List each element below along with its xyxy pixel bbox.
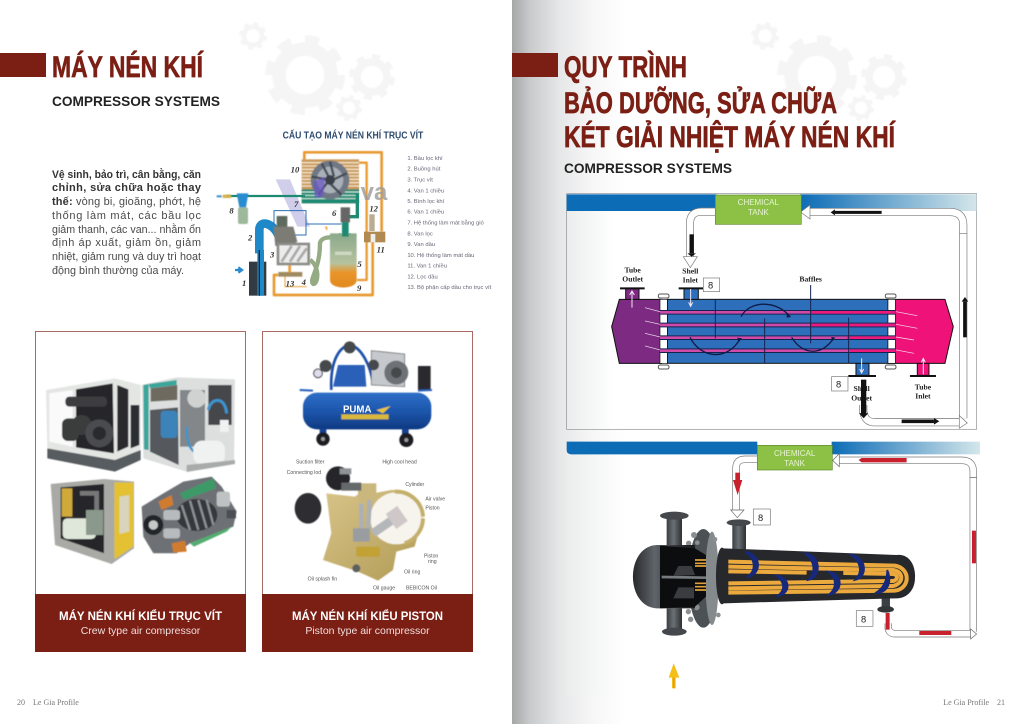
part callouts: Cylinder (405, 482, 425, 488)
baffles (715, 285, 849, 363)
labels: Tube (915, 382, 932, 391)
number 8 box top: 8 (758, 513, 763, 523)
part callouts: Air valve (425, 496, 445, 502)
separator tank (330, 207, 357, 287)
number 8 box bottom (856, 611, 873, 626)
card footer (35, 594, 246, 652)
nozzles (660, 512, 894, 636)
decorative gears left page (240, 23, 393, 120)
card caption: MÁY NÉN KHÍ KIỂU PISTON (292, 608, 443, 623)
left title: MÁY NÉN KHÍ (52, 50, 203, 84)
blue control lines (274, 211, 342, 235)
parts legend (407, 156, 492, 291)
paragraph: định áp xuất, giảm ồn, giảm (52, 237, 201, 249)
number 8 box bottom: 8 (836, 380, 841, 390)
card: piston compressor (262, 332, 473, 652)
part numbers (229, 165, 385, 293)
machine: yellow panel unit (51, 479, 134, 564)
parts legend: 13. Bộ phận cấp dầu cho trục vít (407, 285, 492, 291)
part numbers: 5 (357, 259, 362, 269)
card subcaption: Piston type air compressor (305, 625, 430, 637)
chemical tank: CHEMICAL (774, 449, 816, 458)
paragraph: động bình thường của máy. (52, 265, 184, 277)
part numbers: 9 (357, 283, 362, 293)
parts legend: 4. Van 1 chiều (407, 188, 444, 194)
oil filter items 11 and 12 (364, 214, 385, 242)
labels: Baffles (799, 275, 822, 284)
parts legend: 2. Buồng hút (407, 167, 441, 173)
labels (622, 266, 932, 402)
machine: teal frame unit (142, 377, 235, 472)
part numbers: 11 (377, 244, 385, 254)
cooling radiator and fan (302, 159, 359, 203)
black outlet arrow (859, 380, 868, 418)
part callouts: Oil ring (404, 569, 420, 575)
chemical tank: TANK (748, 208, 769, 217)
part numbers: 8 (229, 205, 234, 215)
diagram frame (567, 194, 977, 429)
blue intake pipe (259, 224, 278, 253)
card: screw compressor (35, 332, 246, 652)
right title: KÉT GIẢI NHIỆT MÁY NÉN KHÍ (564, 120, 895, 154)
labels: Tube (624, 266, 641, 275)
shell and tube exchanger (633, 512, 915, 636)
shell body (723, 548, 915, 603)
tube bundle (728, 562, 907, 593)
labels: Outlet (622, 275, 644, 284)
panel background (567, 454, 624, 695)
paragraph: giảm thanh, các van... nhằm ổn (52, 223, 201, 236)
labels: Inlet (683, 276, 698, 285)
right subtitle: COMPRESSOR SYSTEMS (564, 160, 732, 176)
right title: BẢO DƯỠNG, SỬA CHỮA (564, 86, 837, 120)
parts legend: 12. Lọc dầu (407, 274, 438, 280)
compressor body (273, 216, 310, 277)
number 8 box bottom (832, 377, 848, 391)
chemical tank: CHEMICAL (738, 198, 779, 207)
paragraph: chỉnh, sửa chữa hoặc thay (52, 182, 202, 194)
parts legend: 9. Van dầu (407, 242, 435, 248)
part numbers: 12 (369, 203, 379, 213)
3D heat exchanger diagram (567, 442, 980, 695)
parts legend: 1. Bầu lọc khí (407, 156, 443, 162)
item 1 intake filter (235, 250, 266, 296)
screw compressor schematic (217, 131, 492, 296)
left subtitle: COMPRESSOR SYSTEMS (52, 93, 220, 109)
parts legend: 3. Trục vít (407, 177, 433, 183)
green oil line (310, 237, 331, 284)
paragraph: nhiệt, giảm rung và duy trì hoạt (52, 251, 201, 263)
right title: QUY TRÌNH (564, 50, 687, 84)
card subcaption: Crew type air compressor (81, 625, 201, 637)
labels: Inlet (915, 391, 931, 400)
blue band (567, 442, 980, 454)
piston head cutaway (295, 466, 423, 581)
watermark: iva (354, 179, 388, 206)
right page spine shadow (512, 0, 625, 724)
schematic title: CẤU TẠO MÁY NÉN KHÍ TRỤC VÍT (283, 131, 423, 142)
number 8 box top (753, 509, 770, 525)
watermark (276, 179, 388, 227)
right heading bar (512, 53, 558, 77)
number 8 box top: 8 (708, 281, 713, 291)
part callouts: Oil gauge (373, 585, 395, 591)
part callouts (287, 460, 445, 591)
tubes (660, 312, 895, 351)
card caption: MÁY NÉN KHÍ KIỂU TRỤC VÍT (59, 608, 223, 623)
paragraph: Vệ sinh, bảo trì, cân bằng, căn (52, 168, 201, 181)
red flow arrows (733, 458, 976, 635)
left page footer: 20 Le Gia Profile (17, 698, 79, 707)
blue baffles (745, 552, 889, 597)
machine: screw cutaway (142, 477, 237, 553)
item 8 filter (217, 193, 248, 224)
labels: Shell (854, 384, 870, 393)
part callouts: Connecting lod (287, 470, 321, 476)
right title (564, 50, 895, 154)
part numbers: 1 (242, 278, 246, 288)
decorative gears right page (752, 23, 905, 120)
green air line (227, 193, 357, 253)
paragraph: thống làm mát, các bầu lọc (52, 210, 202, 222)
black flow arrows (687, 209, 968, 425)
return pipes (690, 212, 967, 422)
heat exchanger (612, 285, 953, 376)
part numbers: 4 (301, 277, 307, 287)
parts legend: 6. Van 1 chiều (407, 210, 444, 216)
number 8 box top (703, 278, 720, 292)
part numbers: 10 (291, 165, 300, 175)
chemical tank: TANK (784, 459, 806, 468)
puma air compressor: PUMA (343, 404, 371, 415)
parts legend: 11. Van 1 chiều (407, 264, 447, 270)
channel head (633, 545, 695, 608)
part numbers: 13 (286, 278, 295, 288)
part callouts: High cool head (382, 460, 417, 466)
right page footer: Le Gia Profile 21 (943, 698, 1005, 707)
shell flow arcs (690, 304, 834, 355)
oil pipes (274, 152, 382, 295)
part callouts: Piston (425, 505, 440, 511)
part numbers: 7 (294, 199, 299, 209)
white flow arrows (630, 289, 925, 374)
parts legend: 5. Bình lọc khí (407, 199, 445, 205)
part callouts: Piston (424, 554, 438, 560)
return pipes (736, 459, 977, 634)
paragraph: thế: vòng bi, gioăng, phớt, hệ (52, 196, 201, 208)
paragraph (52, 168, 202, 277)
flange (686, 529, 728, 628)
part callouts: Suction filter (296, 460, 325, 466)
card footer (262, 594, 473, 652)
shell and tube flow diagram (567, 194, 977, 429)
parts legend: 10. Hệ thống làm mát dầu (407, 253, 474, 259)
labels: Outlet (851, 393, 873, 402)
pipe arrowheads (731, 454, 977, 639)
machine: open grey unit (46, 378, 141, 472)
chemical tank (715, 195, 801, 224)
puma air compressor (300, 341, 432, 447)
part numbers: 6 (332, 208, 337, 218)
blue band (567, 194, 977, 211)
pipe arrowheads (683, 205, 967, 428)
part numbers: 3 (269, 249, 275, 259)
parts legend: 7. Hệ thống làm mát bằng gió (407, 220, 484, 227)
machine photos (287, 341, 445, 591)
left heading bar (0, 53, 46, 77)
parts legend: 8. Van lọc (407, 231, 433, 237)
number 8 box bottom: 8 (861, 614, 866, 624)
yellow up arrow (669, 663, 679, 688)
labels: Shell (682, 267, 698, 276)
chemical tank (757, 445, 832, 470)
nozzles (620, 288, 936, 376)
part callouts: BEBICON Oil (406, 585, 437, 591)
part numbers: 2 (247, 232, 253, 242)
part callouts: ring (428, 559, 437, 565)
part callouts: Oil splash fin (308, 577, 337, 583)
